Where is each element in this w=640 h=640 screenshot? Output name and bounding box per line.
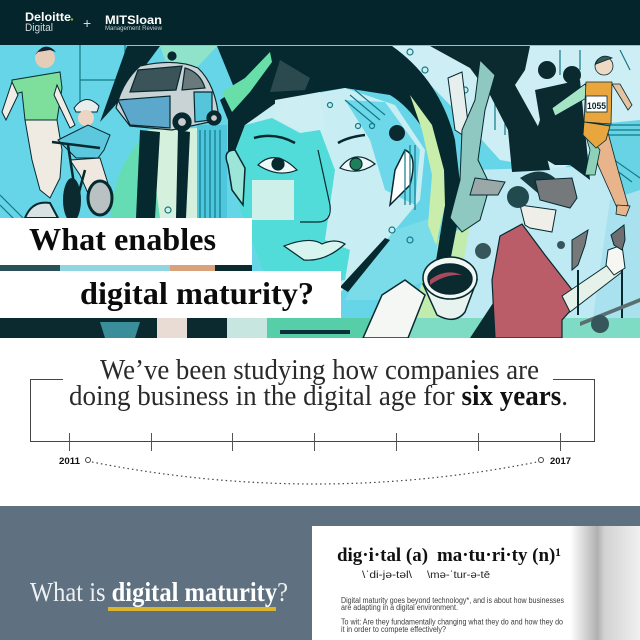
circuit traces left [0,45,220,230]
dark diagonal swooshes [100,46,190,218]
person in VR headset [470,172,640,338]
year label 2011: 2011 [59,456,81,467]
definition text: To wit: Are they fundamentally changing what they do and how they do [341,618,564,626]
header bar [0,0,640,46]
child on bicycle [25,99,112,222]
logo: MIT Sloan Management Review: Management Review [105,25,162,32]
year label 2017: 2017 [550,456,571,467]
plus sign: + [83,15,91,31]
logo: Deloitte Digital [25,12,73,34]
intro statement [69,354,568,412]
circuit traces right [328,49,640,243]
runner with bib 1055 [552,56,632,216]
hair and dark arc around face [217,46,460,260]
dictionary page [312,526,640,640]
definition text: it in order to compete effectively? [341,625,447,634]
pronunciation [362,569,490,581]
timeline 2011 to 2017 [30,380,594,484]
self-driving car [116,52,221,131]
ink splashes [389,125,609,333]
definition text: Digital maturity goes beyond technology*, and is about how businesses [341,596,564,605]
hero illustration [0,45,640,338]
panel: what is digital maturity [0,506,640,640]
intro statement: doing business in the digital age for six years. [69,380,568,412]
dotted arc [86,458,544,484]
logo: MIT Sloan Management Review: MITSloan [105,13,162,27]
definition text [341,596,564,634]
logo: Deloitte Digital: Deloitte [25,12,71,24]
face [226,88,425,300]
background greens and pale areas [110,46,640,338]
title banner: digital maturity?: digital maturity? [80,275,314,311]
logo: MIT Sloan Management Review [105,13,162,32]
title banner: digital maturity? [0,271,341,318]
title banner: What enables: What enables [29,221,216,257]
upside-down figure [448,60,505,232]
facial features [254,135,375,260]
heading underline [108,607,276,611]
intro statement: We’ve been studying how companies are [100,354,539,386]
dark strip under the banners [0,318,370,338]
coffee cup held in hand [363,257,477,338]
pronunciation: \ˈdi-jə-təl\ [362,569,412,581]
pronunciation: \mə-ˈtur-ə-tē [427,569,490,581]
heading: What is digital maturity? [30,577,288,607]
definition headword [337,545,561,566]
strip between the banners [0,265,252,271]
man walking [2,47,75,198]
definition headword: dig·i·tal (a) [337,545,428,566]
dark silhouettes [430,46,590,180]
definition text: are adapting in a digital environment. [341,603,458,612]
title banner: What enables [0,218,252,265]
runner with bib 1055: 1055 [587,101,606,111]
definition headword: ma·tu·ri·ty (n)¹ [437,545,561,566]
logo: Deloitte Digital: Digital [25,22,53,34]
